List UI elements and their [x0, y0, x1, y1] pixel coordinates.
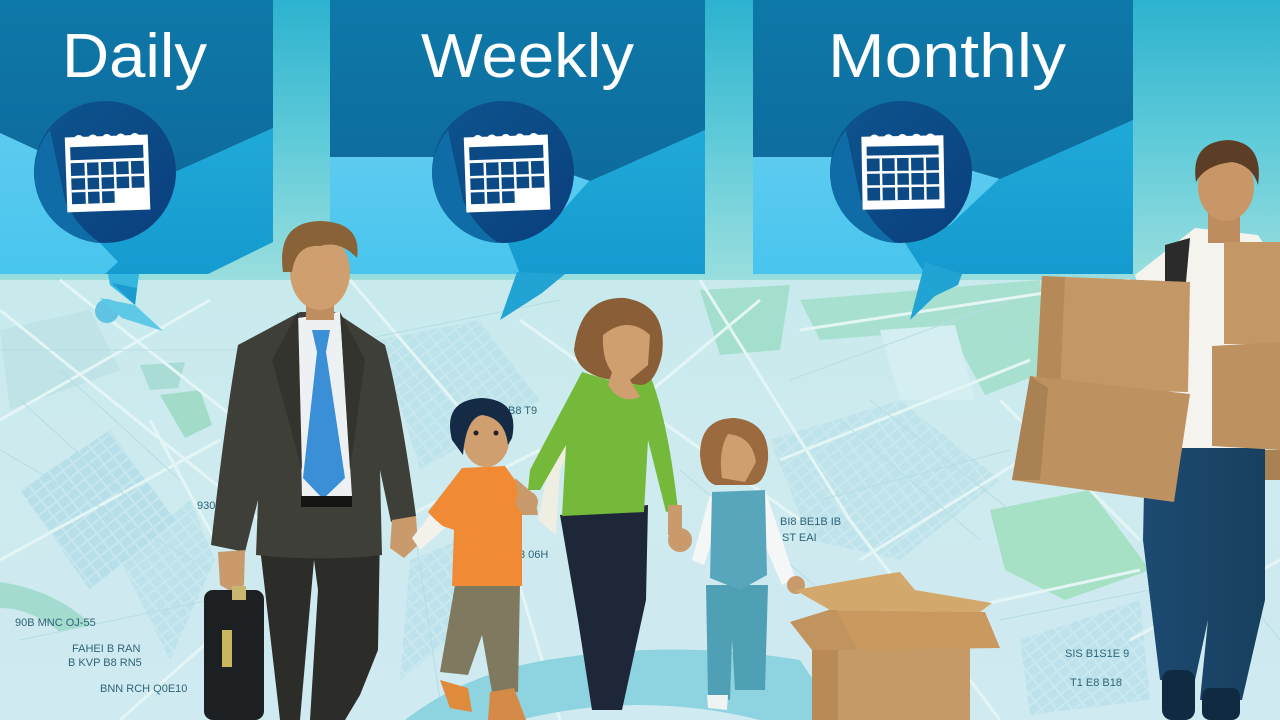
map labels [15, 405, 1129, 695]
figure: boy in orange shirt [412, 398, 538, 720]
legs [706, 585, 768, 700]
hand [516, 491, 692, 552]
tie [303, 330, 345, 499]
trousers [440, 585, 520, 692]
heading: Daily: Daily [62, 22, 207, 91]
figure: girl in teal vest [692, 418, 805, 710]
lapels [272, 312, 302, 470]
backpack strap [1165, 238, 1190, 282]
dark hair [450, 398, 513, 455]
figure: man carrying boxes [1012, 140, 1280, 720]
map labels: 90B MNC OJ-55 [15, 617, 96, 629]
panel body [330, 157, 705, 274]
icon: calendar [830, 101, 972, 243]
neck [306, 290, 334, 320]
green top [528, 372, 678, 516]
map labels: B KVP B8 RN5 [68, 657, 142, 669]
map labels: FAHEI B RAN [72, 643, 141, 655]
belt [301, 496, 352, 507]
head [1198, 153, 1254, 221]
map labels: BNN RCH Q0E10 [100, 683, 187, 695]
tote bag [538, 365, 600, 535]
head [290, 234, 350, 310]
shirt [298, 312, 352, 498]
figure: woman in green top [516, 298, 692, 710]
neck [1208, 205, 1240, 243]
icon: briefcase [204, 586, 264, 720]
map labels: SIS B1S1E 9 [1065, 648, 1129, 660]
cardboard boxes [1012, 242, 1280, 502]
hand [787, 576, 805, 594]
trousers [258, 530, 380, 720]
speech tail [500, 272, 565, 320]
icon: calendar [34, 101, 176, 243]
panel: Monthly [753, 0, 1133, 320]
head [463, 413, 509, 467]
map labels: BI8 BE1B IB [780, 516, 841, 528]
shoes [1162, 670, 1240, 720]
map labels: T1 E8 B18 [1070, 677, 1122, 689]
map labels: 930 [197, 500, 215, 512]
icon: calendar [432, 101, 574, 243]
hair [574, 298, 663, 385]
orange shirt [428, 466, 522, 586]
figure: businessman with briefcase [204, 221, 418, 720]
eyes [474, 430, 498, 436]
map labels: 3 06H [519, 549, 548, 561]
arms [412, 515, 445, 550]
shoes [440, 680, 472, 712]
trousers [560, 505, 648, 710]
map labels: ST EAI [782, 532, 817, 544]
white sleeves [692, 495, 722, 565]
map labels: B8 T9 [508, 405, 537, 417]
panel body [0, 128, 273, 274]
shoe [707, 695, 728, 710]
open cardboard box [790, 572, 1000, 720]
panel: Weekly [330, 0, 705, 320]
hair [700, 418, 768, 485]
heading: Monthly: Monthly [828, 22, 1066, 91]
face [603, 325, 650, 399]
hands [218, 550, 245, 592]
heading: Weekly: Weekly [421, 22, 634, 91]
suit jacket [211, 312, 416, 558]
speech tail [910, 262, 962, 320]
jeans [1143, 445, 1265, 700]
vest [710, 490, 767, 590]
river [405, 649, 840, 720]
panel: Daily [0, 0, 273, 331]
white shirt [1135, 228, 1280, 448]
hair [1195, 140, 1259, 185]
panel body [753, 157, 1133, 274]
speech tail [95, 274, 163, 331]
hair [282, 221, 358, 272]
face [721, 434, 756, 482]
